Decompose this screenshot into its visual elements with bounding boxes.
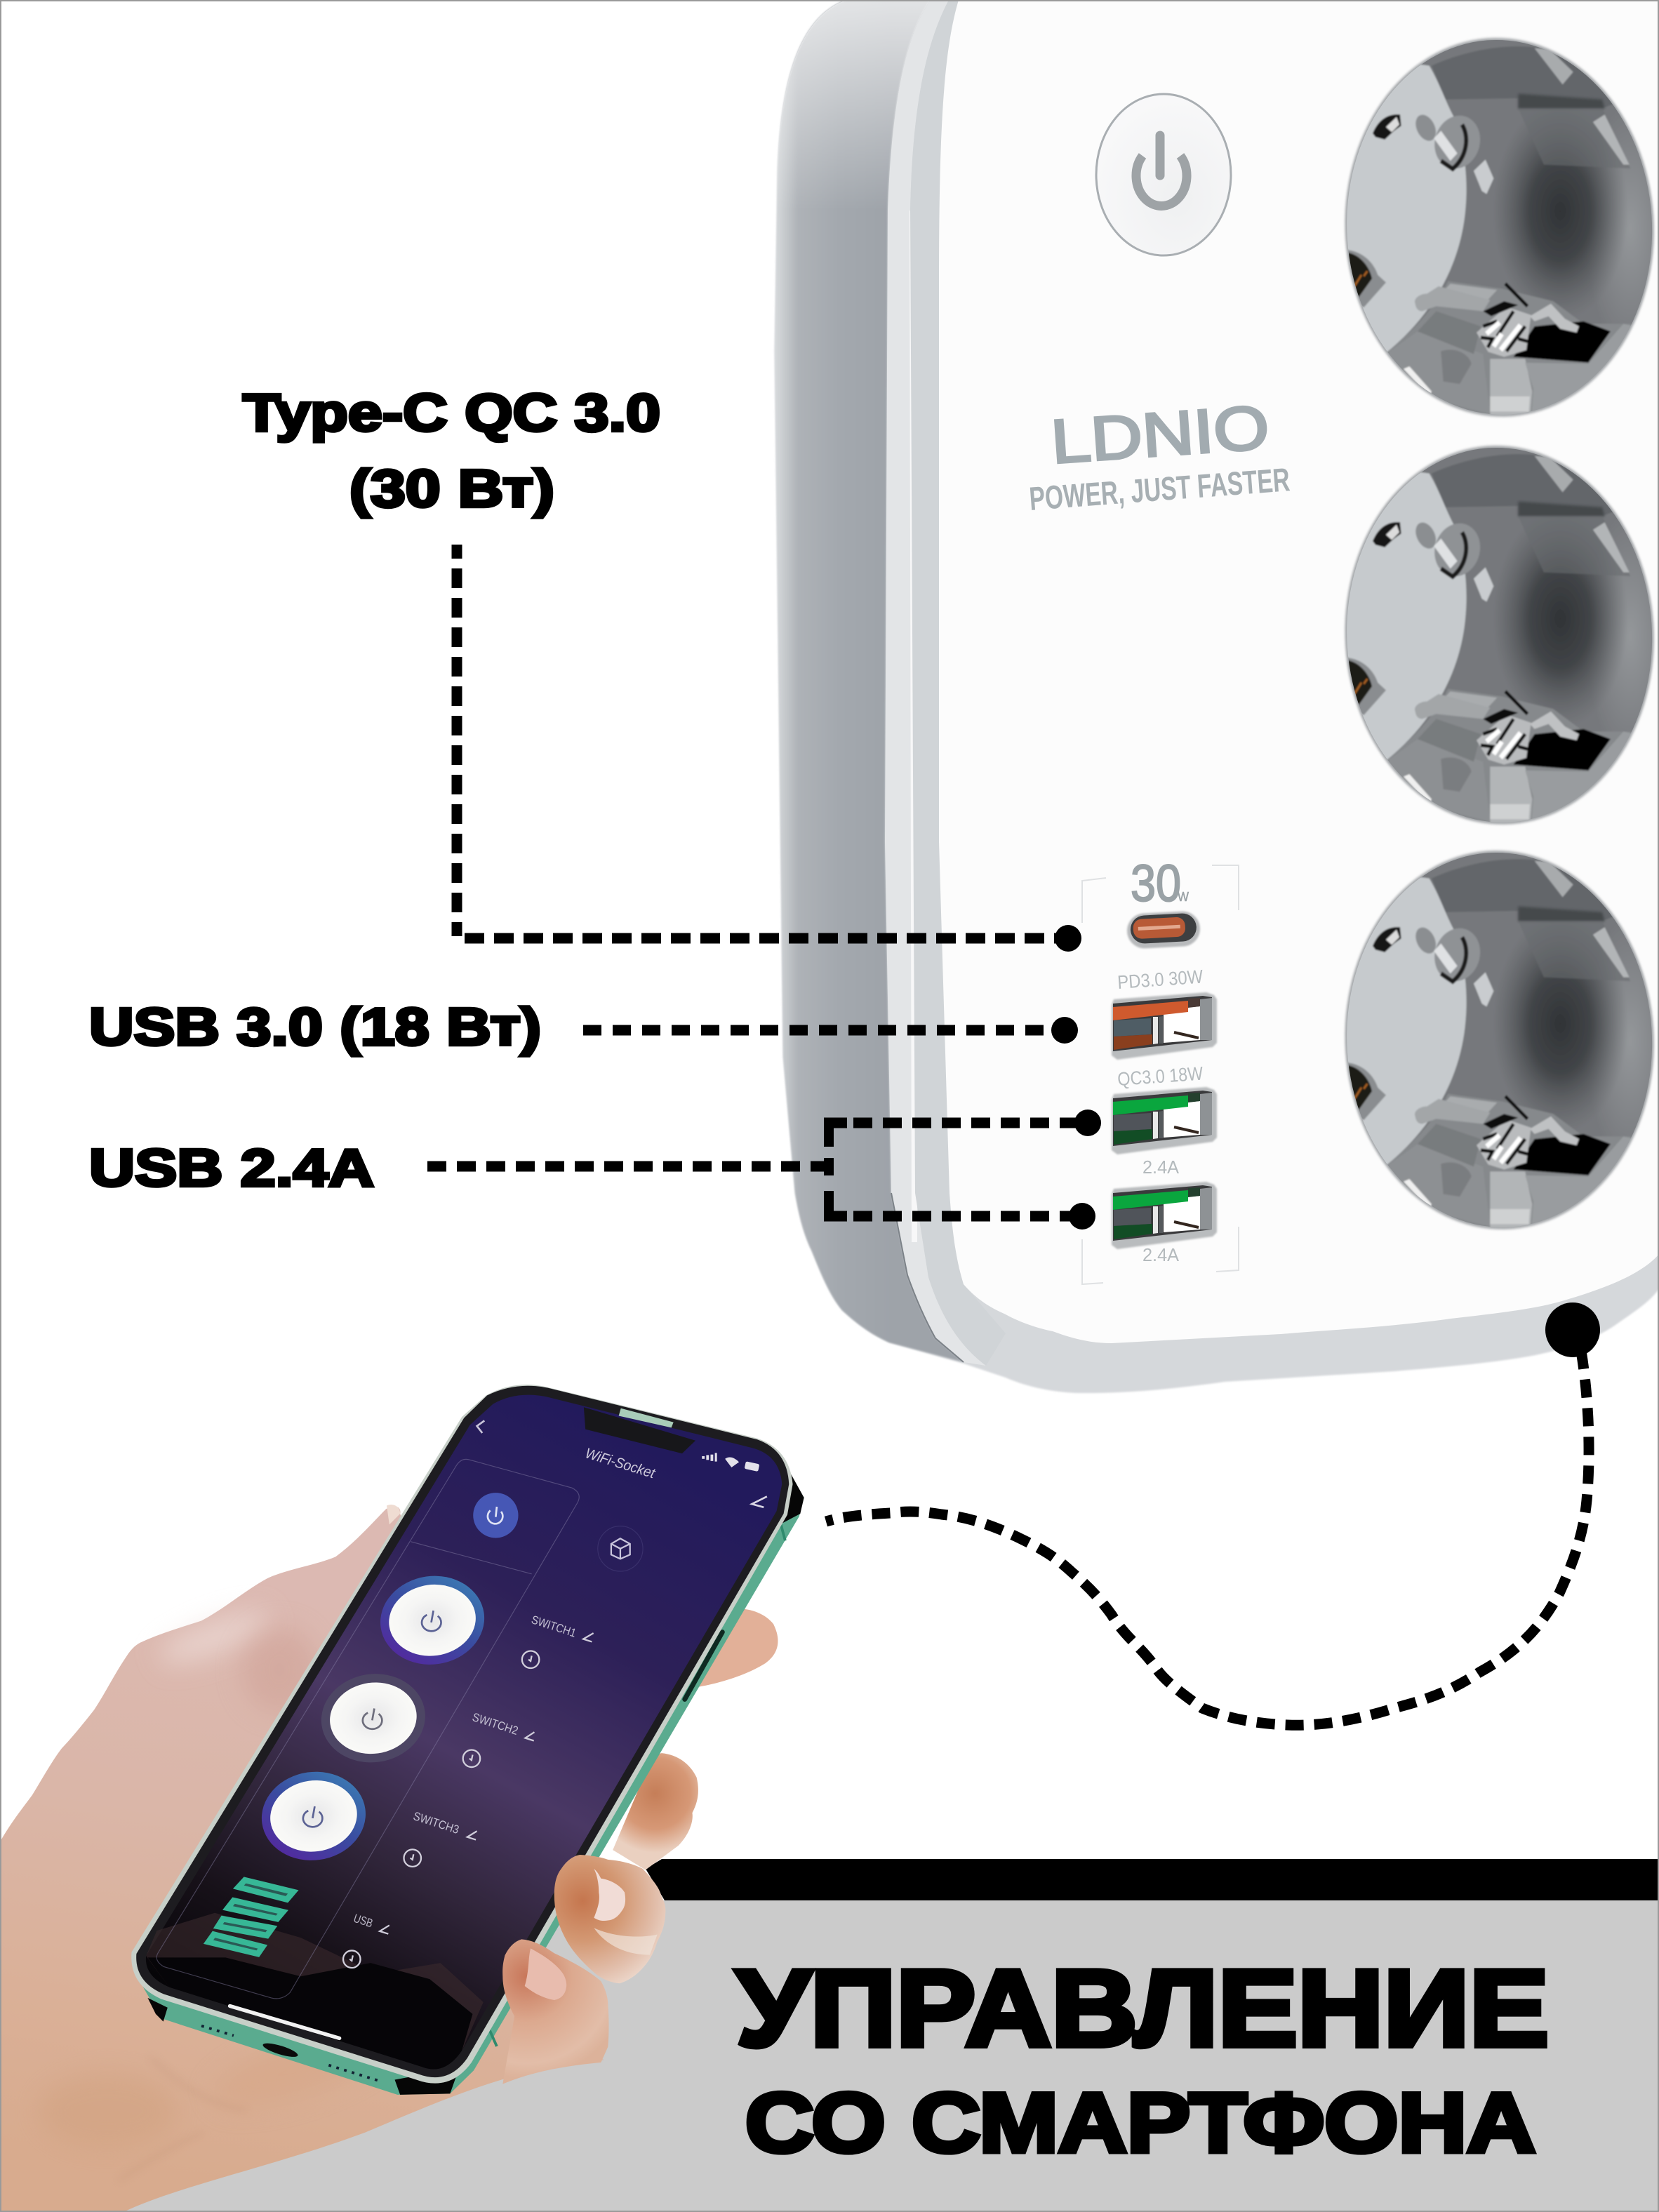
- label 2.4A second: 2.4A: [1142, 1244, 1180, 1265]
- side antenna band: [486, 1517, 785, 2046]
- power button: [1096, 94, 1231, 255]
- orange USB port: [1112, 992, 1217, 1060]
- heading line 1: УПРАВЛЕНИЕ: [736, 1947, 1549, 2069]
- seam shadow line: [891, 1193, 964, 1362]
- wallpaper hills: [146, 1913, 484, 2051]
- label SWITCH3: SWITCH3: [412, 1809, 460, 1837]
- seam highlight: [912, 211, 914, 1242]
- side button: [685, 1632, 722, 1699]
- curved link from strip to phone: [826, 1302, 1600, 1725]
- edit icon: [752, 1496, 767, 1507]
- slogan: POWER, JUST FASTER: [1028, 460, 1291, 517]
- USB ports icon: [208, 1880, 293, 1954]
- grey heading panel: [0, 1900, 1659, 2212]
- palm and back of hand: [0, 1506, 604, 2212]
- 30W mark: W: [1178, 890, 1189, 904]
- smartphone: [131, 1385, 804, 2095]
- timer icons: [343, 1651, 539, 1968]
- white front face: [939, 0, 1659, 1343]
- port bracket: [1082, 865, 1239, 1284]
- grey rim band: [910, 0, 1006, 1366]
- home indicator: [230, 2006, 340, 2038]
- green USB port 1: [1112, 1087, 1217, 1154]
- index fingernail: [525, 1948, 566, 2000]
- black bezel: [136, 1386, 789, 2077]
- power strip: [775, 0, 1659, 1393]
- grey side of the body: [775, 0, 964, 1362]
- notch: [584, 1407, 695, 1453]
- middle fingernail: [594, 1869, 625, 1921]
- socket 2: [1333, 434, 1659, 836]
- screen: [146, 1395, 782, 2070]
- label USB: USB: [352, 1912, 375, 1930]
- switch button 2: [316, 1667, 431, 1769]
- label USB 2.4A: USB 2.4A: [89, 1138, 374, 1197]
- front fingers: [502, 1855, 665, 2084]
- leader line: USB 2.4A: [427, 1110, 1101, 1230]
- heading line 2: СО СМАРТФОНА: [745, 2076, 1535, 2170]
- master power button: [473, 1493, 519, 1538]
- label SWITCH2: SWITCH2: [471, 1710, 520, 1738]
- middle finger pale flakes: [594, 1928, 658, 1955]
- skin highlights and creases: [38, 1505, 400, 2181]
- black side segments: [147, 1473, 804, 2095]
- edit icons: [380, 1633, 594, 1934]
- back fingers: [613, 1608, 778, 1870]
- leader line: Type-C: [457, 545, 1081, 952]
- label QC3.0 18W: QC3.0 18W: [1117, 1063, 1204, 1090]
- logo LDNIO: LDNIO: [1048, 392, 1272, 477]
- dark hill silhouette: [147, 1957, 472, 2070]
- black bar above heading panel: [646, 1859, 1659, 1900]
- socket 1: [1333, 27, 1659, 428]
- label 2.4A: 2.4A: [1142, 1157, 1180, 1178]
- label Type-C QC 3.0: Type-C QC 3.0: [243, 383, 660, 442]
- status icons: [702, 1453, 759, 1472]
- screen panel outline: [156, 1459, 579, 1999]
- settings icon: [598, 1526, 643, 1571]
- index finger: [502, 1939, 608, 2084]
- phone side frame: [137, 1473, 804, 2095]
- middle finger: [554, 1855, 665, 1983]
- green USB port 2: [1112, 1182, 1217, 1249]
- label 30 W: (30 Вт): [349, 459, 554, 518]
- light seam band: [885, 0, 986, 1366]
- label SWITCH1: SWITCH1: [530, 1613, 578, 1640]
- app title: WiFi-Socket: [583, 1445, 658, 1482]
- leader line: USB 3.0: [583, 1017, 1078, 1044]
- label PD3.0 30W: PD3.0 30W: [1117, 966, 1204, 993]
- switch button 1: [375, 1569, 490, 1671]
- Type-C port: [1126, 910, 1201, 950]
- bottom speaker and port: [201, 2026, 382, 2082]
- rim: [775, 0, 1659, 1393]
- socket 3: [1333, 839, 1659, 1241]
- metal rim: [131, 1385, 793, 2084]
- back arrow: [477, 1420, 484, 1433]
- side highlight: [778, 0, 931, 211]
- hand holding smartphone: [0, 1385, 804, 2212]
- earpiece: [619, 1408, 674, 1427]
- switch button 3: [256, 1765, 371, 1867]
- label USB 3.0: USB 3.0 (18 Вт): [89, 997, 541, 1056]
- 30W mark: 30: [1131, 854, 1181, 912]
